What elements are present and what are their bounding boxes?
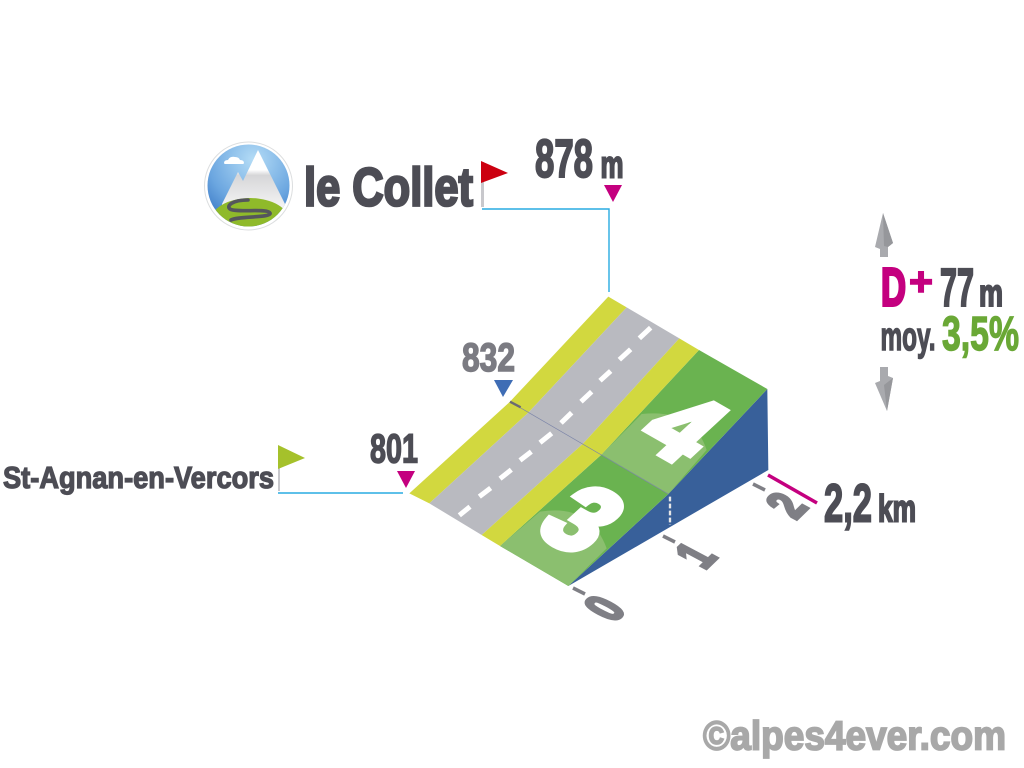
icon: red summit flag bbox=[481, 161, 508, 207]
tick: 832 bbox=[510, 402, 521, 407]
axis: distance ticks bbox=[573, 484, 765, 594]
section number 3: 3 bbox=[516, 466, 648, 573]
section divider bbox=[510, 402, 668, 494]
side face: blue bbox=[568, 389, 768, 586]
highlight: upper section bbox=[602, 413, 707, 494]
label: 801: 801 bbox=[370, 426, 418, 472]
section: green upper bbox=[602, 350, 767, 494]
axis end marker bbox=[768, 475, 817, 503]
stat: D+ 77 m bbox=[881, 258, 1003, 318]
connector: summit line bbox=[482, 209, 609, 292]
arrow: down bbox=[875, 367, 893, 411]
summit altitude: 878 m: 878 bbox=[535, 129, 593, 189]
road centre dashes bbox=[459, 328, 651, 515]
road surface bbox=[429, 307, 679, 535]
icon: mountain badge bbox=[204, 142, 293, 230]
label: 832: 832 bbox=[462, 336, 515, 380]
connector: start line bbox=[278, 492, 403, 494]
section: green lower bbox=[500, 454, 668, 586]
stat: D+ 77 m: D bbox=[881, 258, 906, 318]
ramp: road profile block bbox=[409, 297, 768, 586]
axis label 1: 1 bbox=[664, 535, 728, 576]
icon: green start flag bbox=[278, 445, 305, 491]
stat: D+ 77 m: 77 bbox=[940, 258, 974, 318]
marker: start triangle bbox=[397, 471, 415, 488]
title: le Collet: le Collet bbox=[304, 158, 473, 218]
highlight: lower section bbox=[500, 510, 607, 586]
arrow: up bbox=[875, 213, 893, 257]
axis label 0: 0 bbox=[573, 588, 637, 629]
axis label 2: 2 bbox=[755, 485, 819, 526]
stat: D+ 77 m: m bbox=[979, 273, 1003, 315]
distance: 2,2 km: km bbox=[878, 488, 916, 530]
distance: 2,2 km: 2,2 bbox=[824, 474, 872, 534]
marker: blue triangle bbox=[494, 380, 513, 397]
label: start name: St-Agnan-en-Vercors bbox=[3, 460, 274, 495]
stat: D+ 77 m: + bbox=[909, 260, 933, 304]
dashed km marker bbox=[666, 497, 673, 525]
summit altitude: 878 m: m bbox=[600, 144, 624, 186]
stat: average gradient bbox=[880, 308, 1019, 361]
right verge bbox=[482, 338, 699, 546]
marker: summit triangle bbox=[604, 185, 622, 202]
section number 4: 4 bbox=[617, 374, 750, 481]
left verge bbox=[409, 297, 627, 503]
stat: average gradient: moy. bbox=[880, 315, 936, 359]
